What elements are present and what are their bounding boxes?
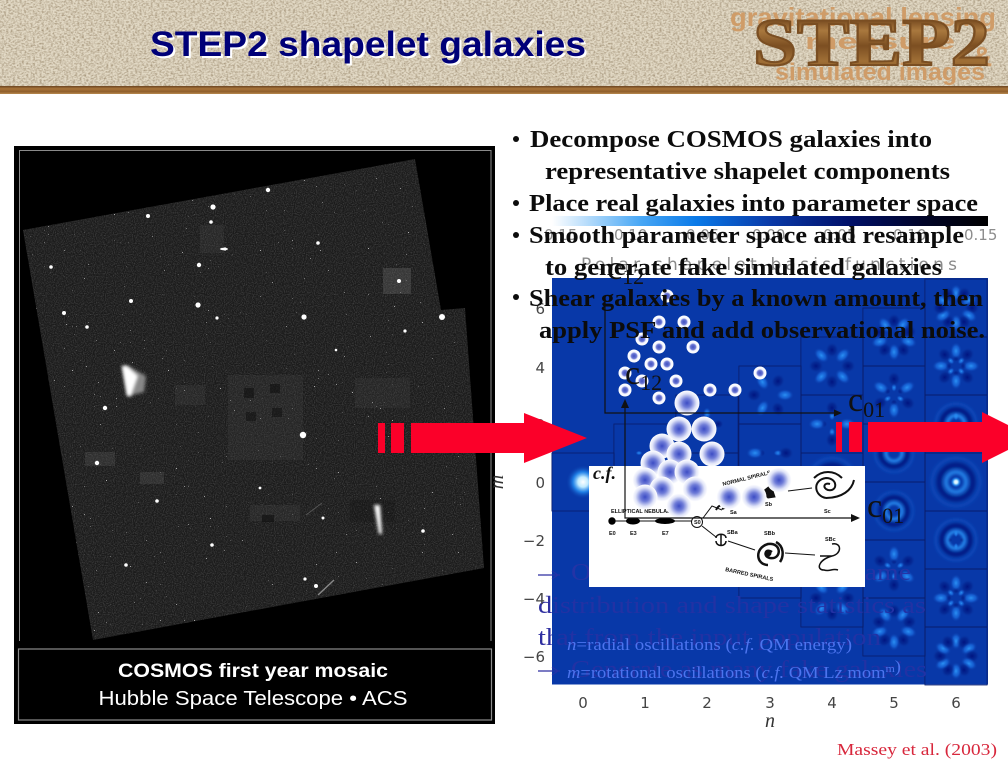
label c12 lower: c bbox=[625, 355, 640, 392]
bullet 3: Smooth parameter space and resample bbox=[529, 223, 964, 249]
n=4 bbox=[801, 337, 863, 627]
caption subtitle: Hubble Space Telescope • ACS bbox=[98, 688, 408, 710]
colour bar labels bbox=[544, 226, 997, 244]
upper parameter axes bbox=[605, 250, 885, 422]
m axis tick labels: −2 bbox=[523, 532, 545, 550]
plot notes: m=rotational oscillations ( c.f. QM Lz mom bbox=[567, 663, 877, 682]
faded text over plot: Generate as many fake galaxies bbox=[571, 657, 927, 683]
bright stars and artefacts bbox=[49, 188, 445, 588]
title: STEP2 shapelet galaxies bbox=[152, 27, 588, 66]
bullet 4 bbox=[513, 286, 985, 344]
faded text beneath plot bbox=[538, 593, 926, 651]
n=0 bbox=[552, 453, 614, 511]
lower parameter axes bbox=[621, 355, 904, 528]
large galaxy markers bbox=[632, 390, 792, 518]
barred spirals branch: BARRED SPIRALS bbox=[725, 567, 774, 583]
n=2 bbox=[676, 395, 738, 569]
m axis tick labels: 4 bbox=[535, 359, 545, 377]
bullet 1: representative shapelet components bbox=[545, 159, 950, 185]
barred spirals branch: SBc bbox=[825, 537, 836, 543]
normal spirals branch: NORMAL SPIRALS bbox=[722, 470, 772, 488]
barred spirals branch: SBa bbox=[727, 530, 739, 536]
plot notes: ) bbox=[895, 657, 900, 676]
logo: STEP2: & bbox=[972, 41, 992, 72]
m axis tick labels: 0 bbox=[535, 474, 545, 492]
bullet 4: Shear galaxies by a known amount, then bbox=[529, 286, 983, 312]
elliptical sequence: E3 bbox=[630, 531, 637, 537]
n=3 bbox=[739, 366, 801, 598]
bright star flare bbox=[122, 366, 146, 396]
n=6 bbox=[922, 279, 990, 685]
n=5 bbox=[861, 308, 927, 656]
logo: STEP2: measure bbox=[805, 29, 955, 54]
elliptical sequence: E0 bbox=[609, 531, 616, 537]
caption heading: COSMOS first year mosaic bbox=[118, 661, 388, 682]
plot notes bbox=[567, 635, 901, 682]
bullet 2: Place real galaxies into parameter space bbox=[529, 191, 978, 217]
m axis tick labels: −4 bbox=[523, 590, 545, 608]
caption box bbox=[18, 649, 492, 720]
faded text over plot: istribution and shape statistics as bbox=[552, 593, 926, 619]
bullet 1 bbox=[513, 127, 950, 185]
n axis tick labels: 2 bbox=[702, 694, 712, 712]
bullet list bbox=[513, 127, 985, 344]
colour bar bbox=[544, 216, 997, 244]
small galaxy markers bbox=[618, 290, 766, 404]
bullet 1: Decompose COSMOS galaxies into bbox=[530, 127, 932, 153]
normal spirals branch bbox=[703, 470, 854, 518]
normal spirals branch: Sc bbox=[824, 509, 831, 515]
panel: COSMOS mosaic bbox=[14, 146, 495, 724]
faded text over plot: at from the input population bbox=[556, 625, 881, 651]
n=1 bbox=[614, 424, 676, 540]
normal spirals branch: Sa bbox=[730, 510, 738, 516]
header banner bbox=[0, 0, 1008, 94]
shapelet basis plot bbox=[552, 278, 990, 685]
colour bar labels: 0.15 bbox=[544, 226, 577, 244]
m axis label: m bbox=[486, 475, 508, 489]
faded text beneath plot: distribution and shape statistics as bbox=[538, 593, 926, 619]
m axis tick labels: 2 bbox=[535, 416, 545, 434]
faded text beneath plot: that from the input population bbox=[538, 625, 881, 651]
right red arrow bbox=[836, 412, 1008, 463]
label c12 lower: 12 bbox=[640, 370, 662, 395]
colour bar labels: 0.10 bbox=[893, 226, 926, 244]
label c01 upper: c bbox=[848, 382, 863, 419]
plot notes: n=radial oscillations ( c.f. QM energy) bbox=[567, 635, 852, 654]
bullet 3: to generate fake simulated galaxies bbox=[545, 255, 942, 281]
colour bar labels: 0.00 bbox=[752, 226, 785, 244]
n axis tick labels: 1 bbox=[640, 694, 650, 712]
logo: STEP2 bbox=[730, 2, 996, 86]
label c12 upper: 12 bbox=[622, 264, 644, 289]
star streak bbox=[306, 503, 382, 595]
panel: Hubble tuning fork bbox=[589, 463, 865, 587]
logo: STEP2: STEP2 bbox=[753, 4, 990, 80]
n axis tick labels: 4 bbox=[827, 694, 837, 712]
label c01 upper: 01 bbox=[863, 397, 885, 422]
n axis tick labels: 3 bbox=[765, 694, 775, 712]
elliptical sequence: ELLIPTICAL NEBULAE bbox=[611, 509, 671, 515]
barred spirals branch bbox=[702, 526, 840, 583]
title: STEP2 shapelet galaxies bbox=[150, 25, 586, 64]
n axis tick labels bbox=[578, 694, 961, 712]
normal spirals branch: Sb bbox=[765, 502, 773, 508]
elliptical sequence: E7 bbox=[662, 531, 669, 537]
elliptical sequence: S0 bbox=[694, 520, 701, 526]
n axis tick labels: 6 bbox=[951, 694, 961, 712]
c.f. label: c.f. bbox=[593, 463, 616, 483]
mosaic image field bbox=[20, 155, 490, 645]
logo: STEP2: simulated images bbox=[775, 59, 985, 86]
colour bar labels: 0.15 bbox=[964, 226, 997, 244]
m axis tick labels: 6 bbox=[535, 300, 545, 318]
left red arrow bbox=[378, 413, 587, 463]
n axis tick labels: 0 bbox=[578, 694, 588, 712]
label c12 upper: c bbox=[607, 250, 622, 287]
label c01 lower: c bbox=[867, 488, 882, 525]
bullet 4: apply PSF and add observational noise. bbox=[539, 318, 985, 344]
n axis label: n bbox=[765, 710, 775, 732]
faded text over plot: Output catalogue has the same bbox=[571, 560, 911, 586]
faded text over plot bbox=[538, 560, 927, 683]
bullet 3 bbox=[513, 223, 964, 281]
colour bar labels: 0.05 bbox=[686, 226, 719, 244]
colour bar labels: 0.10 bbox=[614, 226, 647, 244]
plot notes: m bbox=[885, 663, 895, 675]
m axis tick labels: −6 bbox=[523, 648, 545, 666]
n axis tick labels: 5 bbox=[889, 694, 899, 712]
label c01 lower: 01 bbox=[882, 503, 904, 528]
wooden rule bbox=[0, 86, 1008, 94]
logo: STEP2: gravitational lensing bbox=[730, 2, 996, 32]
m axis tick labels bbox=[523, 300, 545, 666]
barred spirals branch: SBb bbox=[764, 531, 776, 537]
elliptical sequence bbox=[608, 509, 702, 537]
colour bar labels: 0.05 bbox=[823, 226, 856, 244]
citation: Massey et al. (2003) bbox=[837, 740, 997, 759]
plot title: Polar shapelet basis functions bbox=[581, 255, 957, 275]
